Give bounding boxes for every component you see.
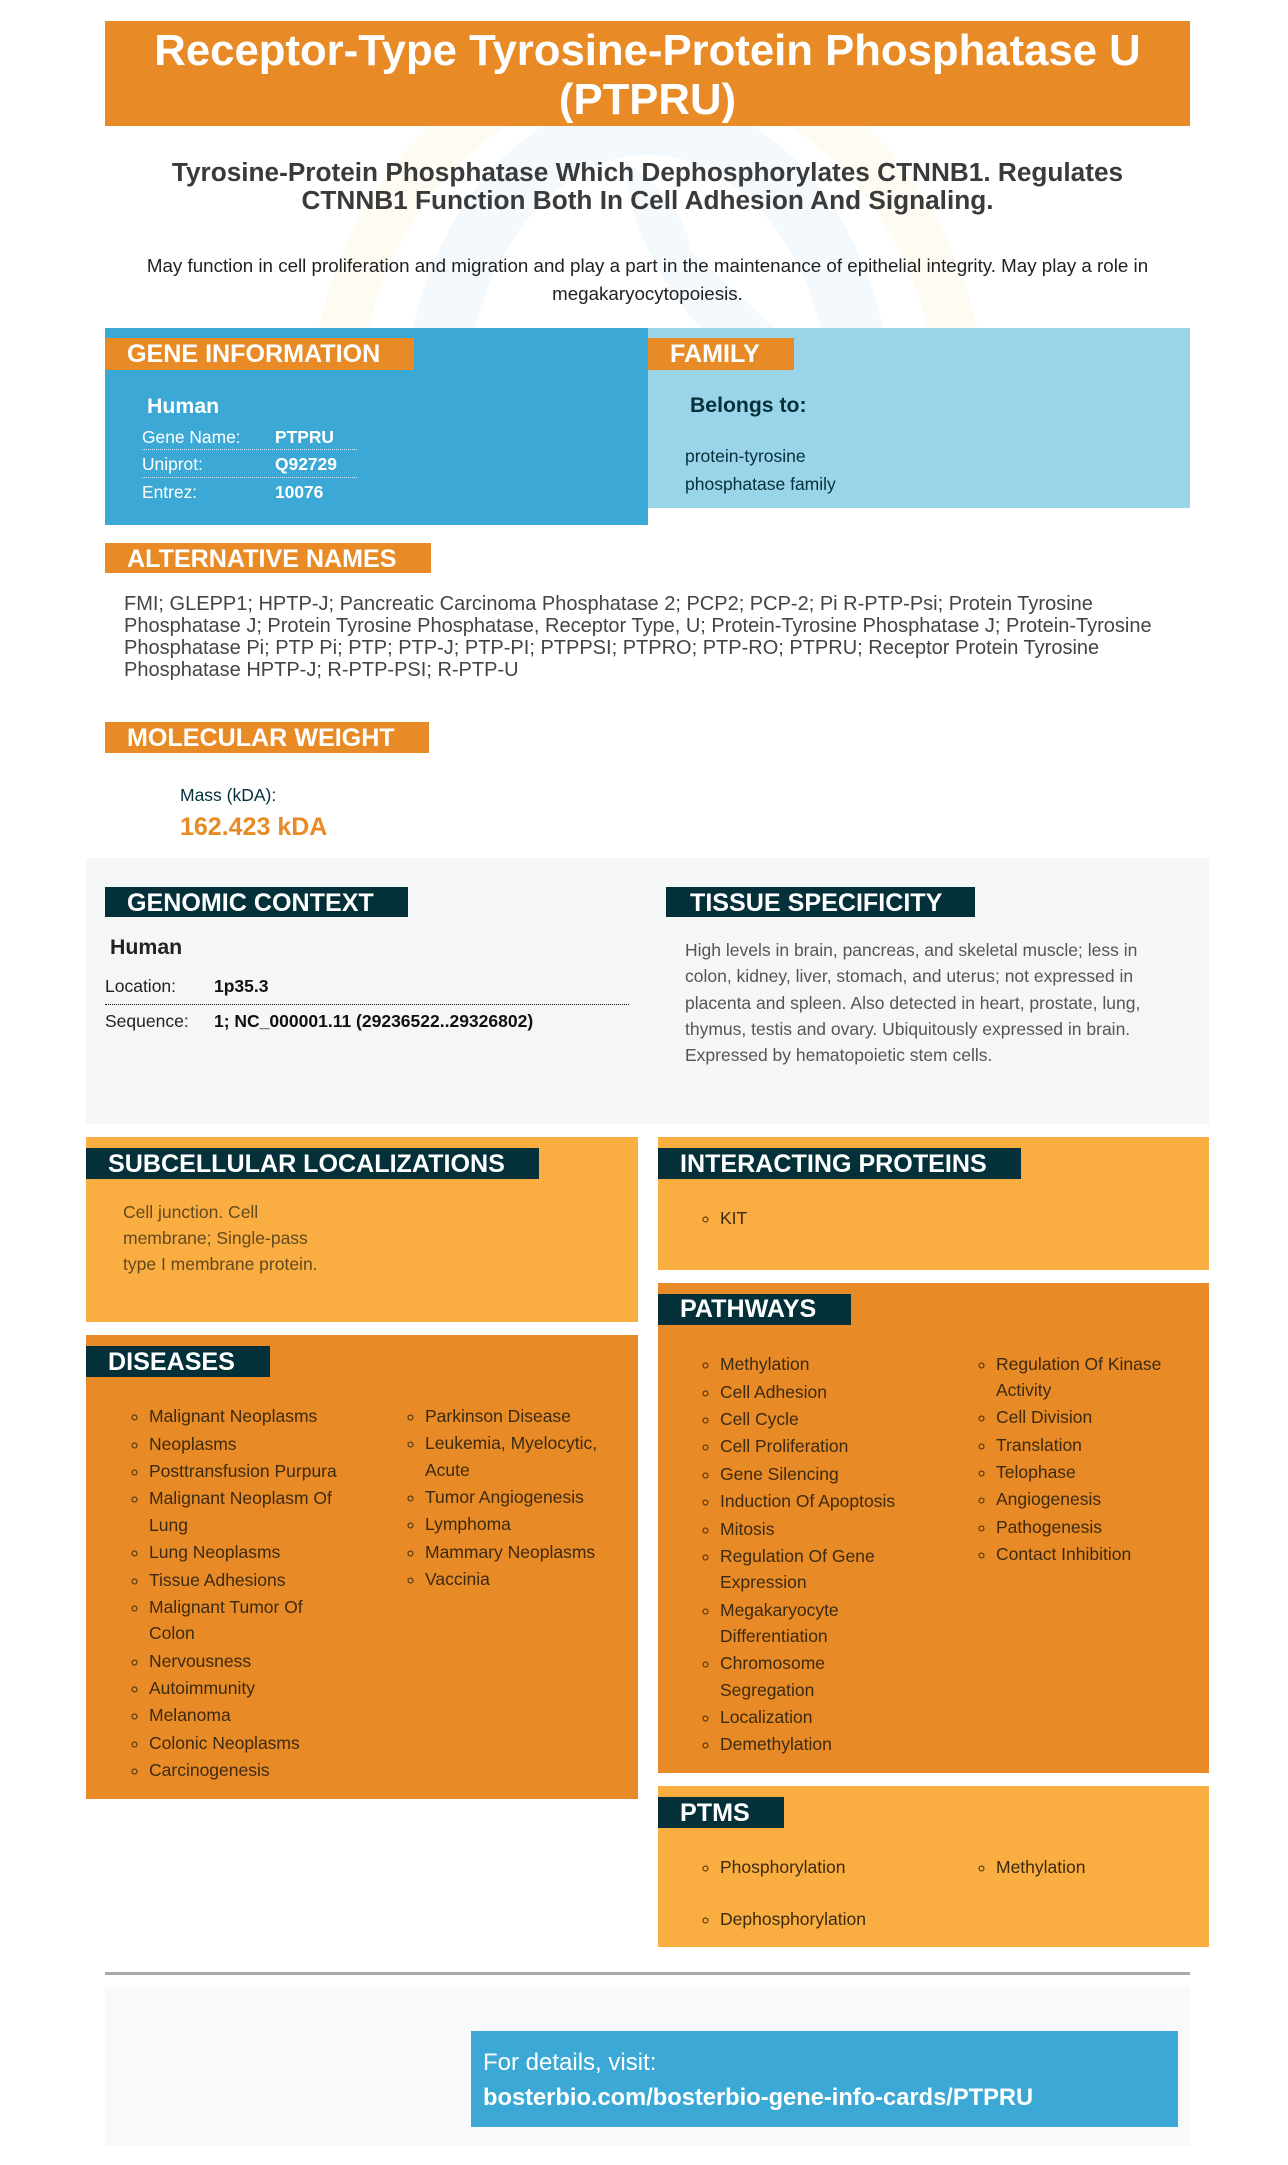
heading: subcellular localizations: SUBCELLULAR LOCALIZATIONS <box>108 1150 505 1178</box>
disease list column 2: Lymphoma <box>425 1514 511 1534</box>
family text <box>685 446 836 494</box>
details prompt: For details, visit: <box>483 2049 656 2076</box>
footer divider <box>105 1972 1190 1975</box>
subtitle: Tyrosine-Protein Phosphatase Which Dephosphorylates CTNNB1. Regulates <box>172 157 1123 187</box>
disease list column 2: Leukemia, Myelocytic, <box>425 1433 597 1453</box>
pathway list column 1: Cell Proliferation <box>720 1436 848 1456</box>
localization text: membrane; Single-pass <box>123 1228 308 1248</box>
uniprot row: Uniprot: <box>142 454 203 474</box>
disease list column 1: Neoplasms <box>149 1434 237 1454</box>
disease list column 1: Malignant Tumor Of <box>149 1597 303 1617</box>
description: megakaryocytopoiesis. <box>552 283 743 304</box>
tissue specificity text: placenta and spleen. Also detected in heart, prostate, lung, <box>685 993 1140 1013</box>
subtitle: CTNNB1 Function Both In Cell Adhesion And Signaling. <box>302 185 994 215</box>
subtitle <box>172 157 1123 215</box>
pathway list column 1: Mitosis <box>720 1519 774 1539</box>
disease list column 2 <box>408 1406 597 1589</box>
pathway list column 1 <box>702 1354 895 1754</box>
heading: molecular weight: MOLECULAR WEIGHT <box>127 724 395 752</box>
heading: PTMs: PTMS <box>680 1799 750 1827</box>
gene name row: Gene Name: <box>142 427 241 447</box>
disease list column 1: Malignant Neoplasms <box>149 1406 317 1426</box>
species label: Human <box>110 935 182 959</box>
tissue specificity text: colon, kidney, liver, stomach, and uterus; not expressed in <box>685 966 1133 986</box>
panel: subcellular localizations <box>86 1137 638 1322</box>
panel: PTMs <box>658 1786 1209 1947</box>
disease list column 1: Lung <box>149 1515 188 1535</box>
pathway list column 1: Methylation <box>720 1354 810 1374</box>
entrez row: Entrez: <box>142 482 197 502</box>
disease list column 1: Colonic Neoplasms <box>149 1733 300 1753</box>
entrez row <box>142 482 323 502</box>
disease list column 1: Tissue Adhesions <box>149 1570 286 1590</box>
species label: Human <box>147 394 219 418</box>
disease list column 1: Melanoma <box>149 1705 231 1725</box>
heading: diseases: DISEASES <box>108 1348 235 1376</box>
mass label: Mass (kDA): <box>180 785 276 805</box>
pathway list column 2 <box>978 1354 1161 1564</box>
gene name row: PTPRU <box>275 427 334 447</box>
pathway list column 2: Contact Inhibition <box>996 1544 1131 1564</box>
heading: interacting proteins: INTERACTING PROTEINS <box>680 1150 987 1178</box>
disease list column 1: Nervousness <box>149 1651 251 1671</box>
pathway list column 2: Activity <box>996 1380 1051 1400</box>
disease list column 1: Colon <box>149 1623 195 1643</box>
pathway list column 2: Cell Division <box>996 1407 1092 1427</box>
disease list column 2: Vaccinia <box>425 1569 490 1589</box>
heading: alternative names: ALTERNATIVE NAMES <box>127 545 397 573</box>
alternative names text: Phosphatase Pi; PTP Pi; PTP; PTP-J; PTP-PI; PTPPSI; PTPRO; PTP-RO; PTPRU; Receptor Protein Tyrosine <box>124 637 1099 659</box>
details callout <box>471 2031 1178 2127</box>
pathway list column 1: Cell Adhesion <box>720 1382 827 1402</box>
heading: pathways <box>658 1294 851 1325</box>
pathway list column 1: Induction Of Apoptosis <box>720 1491 895 1511</box>
disease list column 2: Tumor Angiogenesis <box>425 1487 584 1507</box>
pathway list column 1: Gene Silencing <box>720 1464 839 1484</box>
pathway list column 1: Segregation <box>720 1680 814 1700</box>
alternative names text: Phosphatase HPTP-J; R-PTP-PSI; R-PTP-U <box>124 659 519 681</box>
pathway list column 2: Angiogenesis <box>996 1489 1101 1509</box>
disease list column 2: Mammary Neoplasms <box>425 1542 595 1562</box>
pathway list column 2: Telophase <box>996 1462 1076 1482</box>
heading: pathways: PATHWAYS <box>680 1295 816 1323</box>
panel: genomic context and tissue specificity <box>86 858 1209 1124</box>
location row: Location: <box>105 976 176 996</box>
PTM list column 1: Dephosphorylation <box>720 1909 866 1929</box>
pathway list column 1: Regulation Of Gene <box>720 1546 875 1566</box>
tissue specificity text: thymus, testis and ovary. Ubiquitously expressed in brain. <box>685 1019 1130 1039</box>
disease list column 1: Carcinogenesis <box>149 1760 270 1780</box>
sequence row <box>105 1011 533 1031</box>
heading: gene information: GENE INFORMATION <box>127 340 380 368</box>
pathway list column 2: Translation <box>996 1435 1082 1455</box>
heading: family <box>648 338 794 370</box>
PTM list column 1: Phosphorylation <box>720 1857 846 1877</box>
entrez row: 10076 <box>275 482 323 502</box>
family text: protein-tyrosine <box>685 446 806 466</box>
tissue specificity text <box>685 940 1140 1065</box>
localization text: type I membrane protein. <box>123 1254 318 1274</box>
mass value: 162.423 kDA <box>180 813 327 841</box>
pathway list column 2: Regulation Of Kinase <box>996 1354 1161 1374</box>
pathway list column 1: Chromosome <box>720 1653 825 1673</box>
panel: pathways <box>658 1283 1209 1773</box>
disease list column 1: Autoimmunity <box>149 1678 255 1698</box>
pathway list column 1: Localization <box>720 1707 812 1727</box>
location row <box>105 975 629 1005</box>
disease list column 1: Posttransfusion Purpura <box>149 1461 337 1481</box>
disease list column 2: Acute <box>425 1460 470 1480</box>
panel: gene information <box>105 328 648 525</box>
pathway list column 1: Cell Cycle <box>720 1409 799 1429</box>
pathway list column 1: Expression <box>720 1572 807 1592</box>
background watermark logo <box>319 126 977 328</box>
family text: phosphatase family <box>685 474 836 494</box>
panel: diseases <box>86 1335 638 1799</box>
PTM list column 2: Methylation <box>996 1857 1086 1877</box>
heading: PTMs <box>658 1797 784 1828</box>
heading: tissue specificity: TISSUE SPECIFICITY <box>690 889 942 917</box>
localization text <box>123 1202 318 1274</box>
gene name row <box>142 425 357 450</box>
alternative names text <box>124 593 1152 681</box>
uniprot row <box>142 452 357 478</box>
panel: interacting proteins <box>658 1137 1209 1270</box>
heading: genomic context: GENOMIC CONTEXT <box>127 889 374 917</box>
disease list column 2: Parkinson Disease <box>425 1406 571 1426</box>
tissue specificity text: High levels in brain, pancreas, and skeletal muscle; less in <box>685 940 1137 960</box>
location row: 1p35.3 <box>214 976 268 996</box>
PTM list column 1 <box>702 1857 866 1929</box>
panel: family <box>648 328 1190 508</box>
belongs to label: Belongs to: <box>690 394 807 417</box>
alternative names text: FMI; GLEPP1; HPTP-J; Pancreatic Carcinoma Phosphatase 2; PCP2; PCP-2; Pi R-PTP-Psi; Protein Tyrosine <box>124 593 1093 615</box>
alternative names text: Phosphatase J; Protein Tyrosine Phosphatase, Receptor Type, U; Protein-Tyrosine Phosphatase J; Protein-Tyrosine <box>124 615 1152 637</box>
title banner: Receptor-Type Tyrosine-Protein Phosphatase U <box>154 26 1141 75</box>
description: May function in cell proliferation and migration and play a part in the maintenance of epithelial integrity. May play a role in <box>147 255 1148 276</box>
pathway list column 1: Demethylation <box>720 1734 832 1754</box>
pathway list column 2: Pathogenesis <box>996 1517 1102 1537</box>
title banner: (PTPRU) <box>559 74 736 124</box>
description <box>147 255 1148 304</box>
sequence row: Sequence: <box>105 1011 189 1031</box>
footer panel <box>105 1987 1190 2146</box>
heading: family: FAMILY <box>670 340 760 368</box>
panel: genomic context and tissue specificity: 1; NC_000001.11 (29236522..29326802) <box>214 1011 533 1031</box>
protein list: KIT <box>720 1208 747 1228</box>
disease list column 1 <box>132 1406 337 1780</box>
heading: diseases <box>86 1346 270 1377</box>
localization text: Cell junction. Cell <box>123 1202 258 1222</box>
disease list column 1: Malignant Neoplasm Of <box>149 1488 332 1508</box>
pathway list column 1: Megakaryocyte <box>720 1600 839 1620</box>
details link: bosterbio.com/bosterbio-gene-info-cards/PTPRU <box>483 2085 1033 2111</box>
uniprot row: Q92729 <box>275 454 337 474</box>
pathway list column 1: Differentiation <box>720 1626 828 1646</box>
tissue specificity text: Expressed by hematopoietic stem cells. <box>685 1045 992 1065</box>
title banner <box>105 21 1190 126</box>
disease list column 1: Lung Neoplasms <box>149 1542 280 1562</box>
